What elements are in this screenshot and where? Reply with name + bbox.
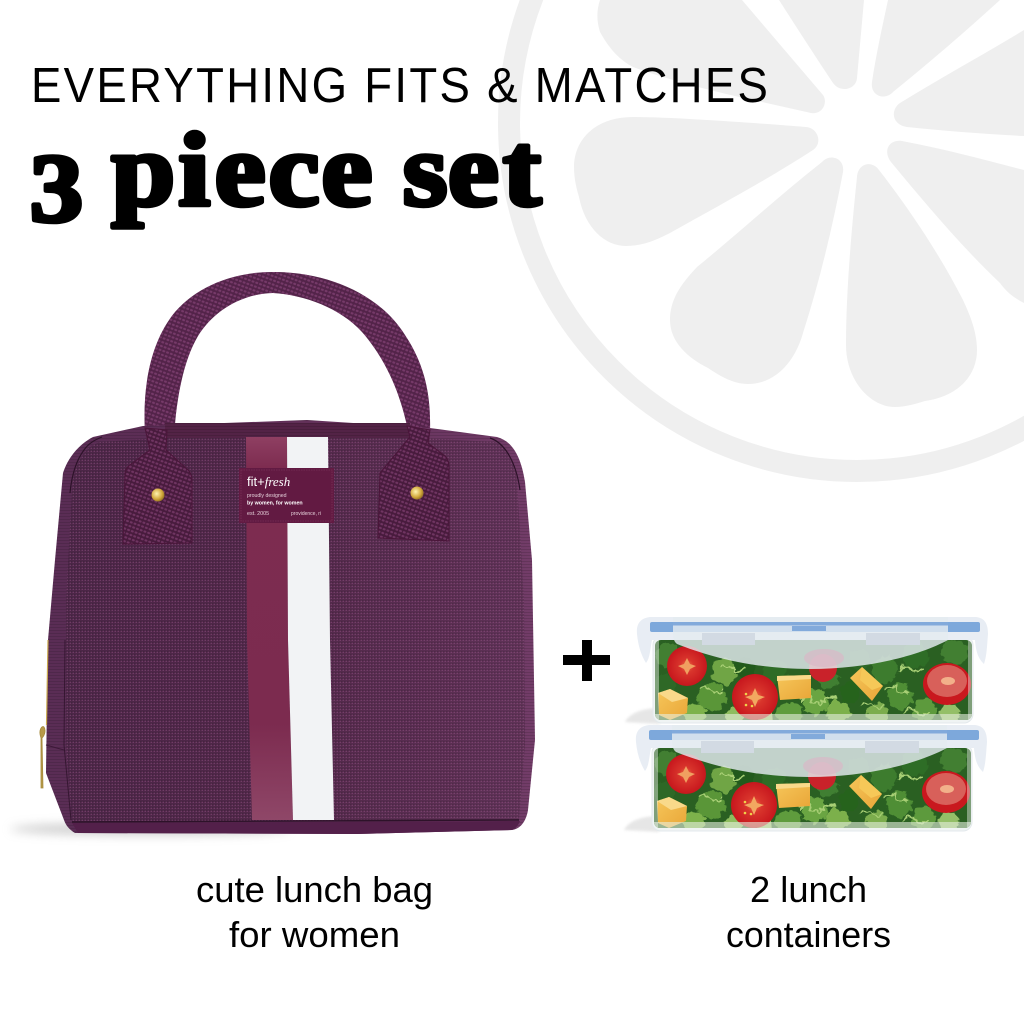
brand label: providence, ri — [291, 511, 321, 517]
brand label: est. 2005 — [247, 511, 269, 517]
brand label: fit+fresh — [247, 474, 290, 489]
maroon stripe — [246, 437, 293, 820]
icon: plus sign — [563, 640, 610, 681]
title: 3 piece set: set — [403, 112, 541, 228]
handle tab right — [378, 426, 449, 541]
bag shadow — [10, 823, 290, 835]
icon: lemon slice watermark — [509, 0, 1024, 471]
white stripe — [287, 437, 334, 820]
rivet left — [152, 488, 164, 502]
product: lunch bag — [10, 272, 535, 835]
handle tab left — [123, 428, 192, 544]
caption: lunch containers — [726, 869, 891, 955]
zipper pull — [40, 640, 48, 788]
title: 3 piece set: 3 — [30, 135, 83, 243]
caption: lunch bag: cute lunch bag — [196, 869, 433, 910]
bag handle — [144, 272, 430, 434]
caption: lunch bag: for women — [229, 914, 400, 955]
product: lunch container bottom — [624, 725, 987, 835]
bag body — [46, 420, 535, 834]
caption: lunch containers: 2 lunch — [750, 869, 867, 910]
brand label: by women, for women — [247, 500, 303, 506]
caption: lunch bag — [196, 869, 433, 955]
rivet right — [410, 486, 424, 500]
product: lunch container top — [625, 617, 988, 727]
brand label — [239, 468, 334, 523]
zipper flap — [165, 423, 410, 438]
caption: lunch containers: containers — [726, 914, 891, 955]
brand label: proudly designed — [247, 493, 287, 499]
title: 3 piece set: piece — [111, 112, 372, 228]
heading: everything fits and matches: EVERYTHING FITS & MATCHES — [31, 58, 768, 113]
